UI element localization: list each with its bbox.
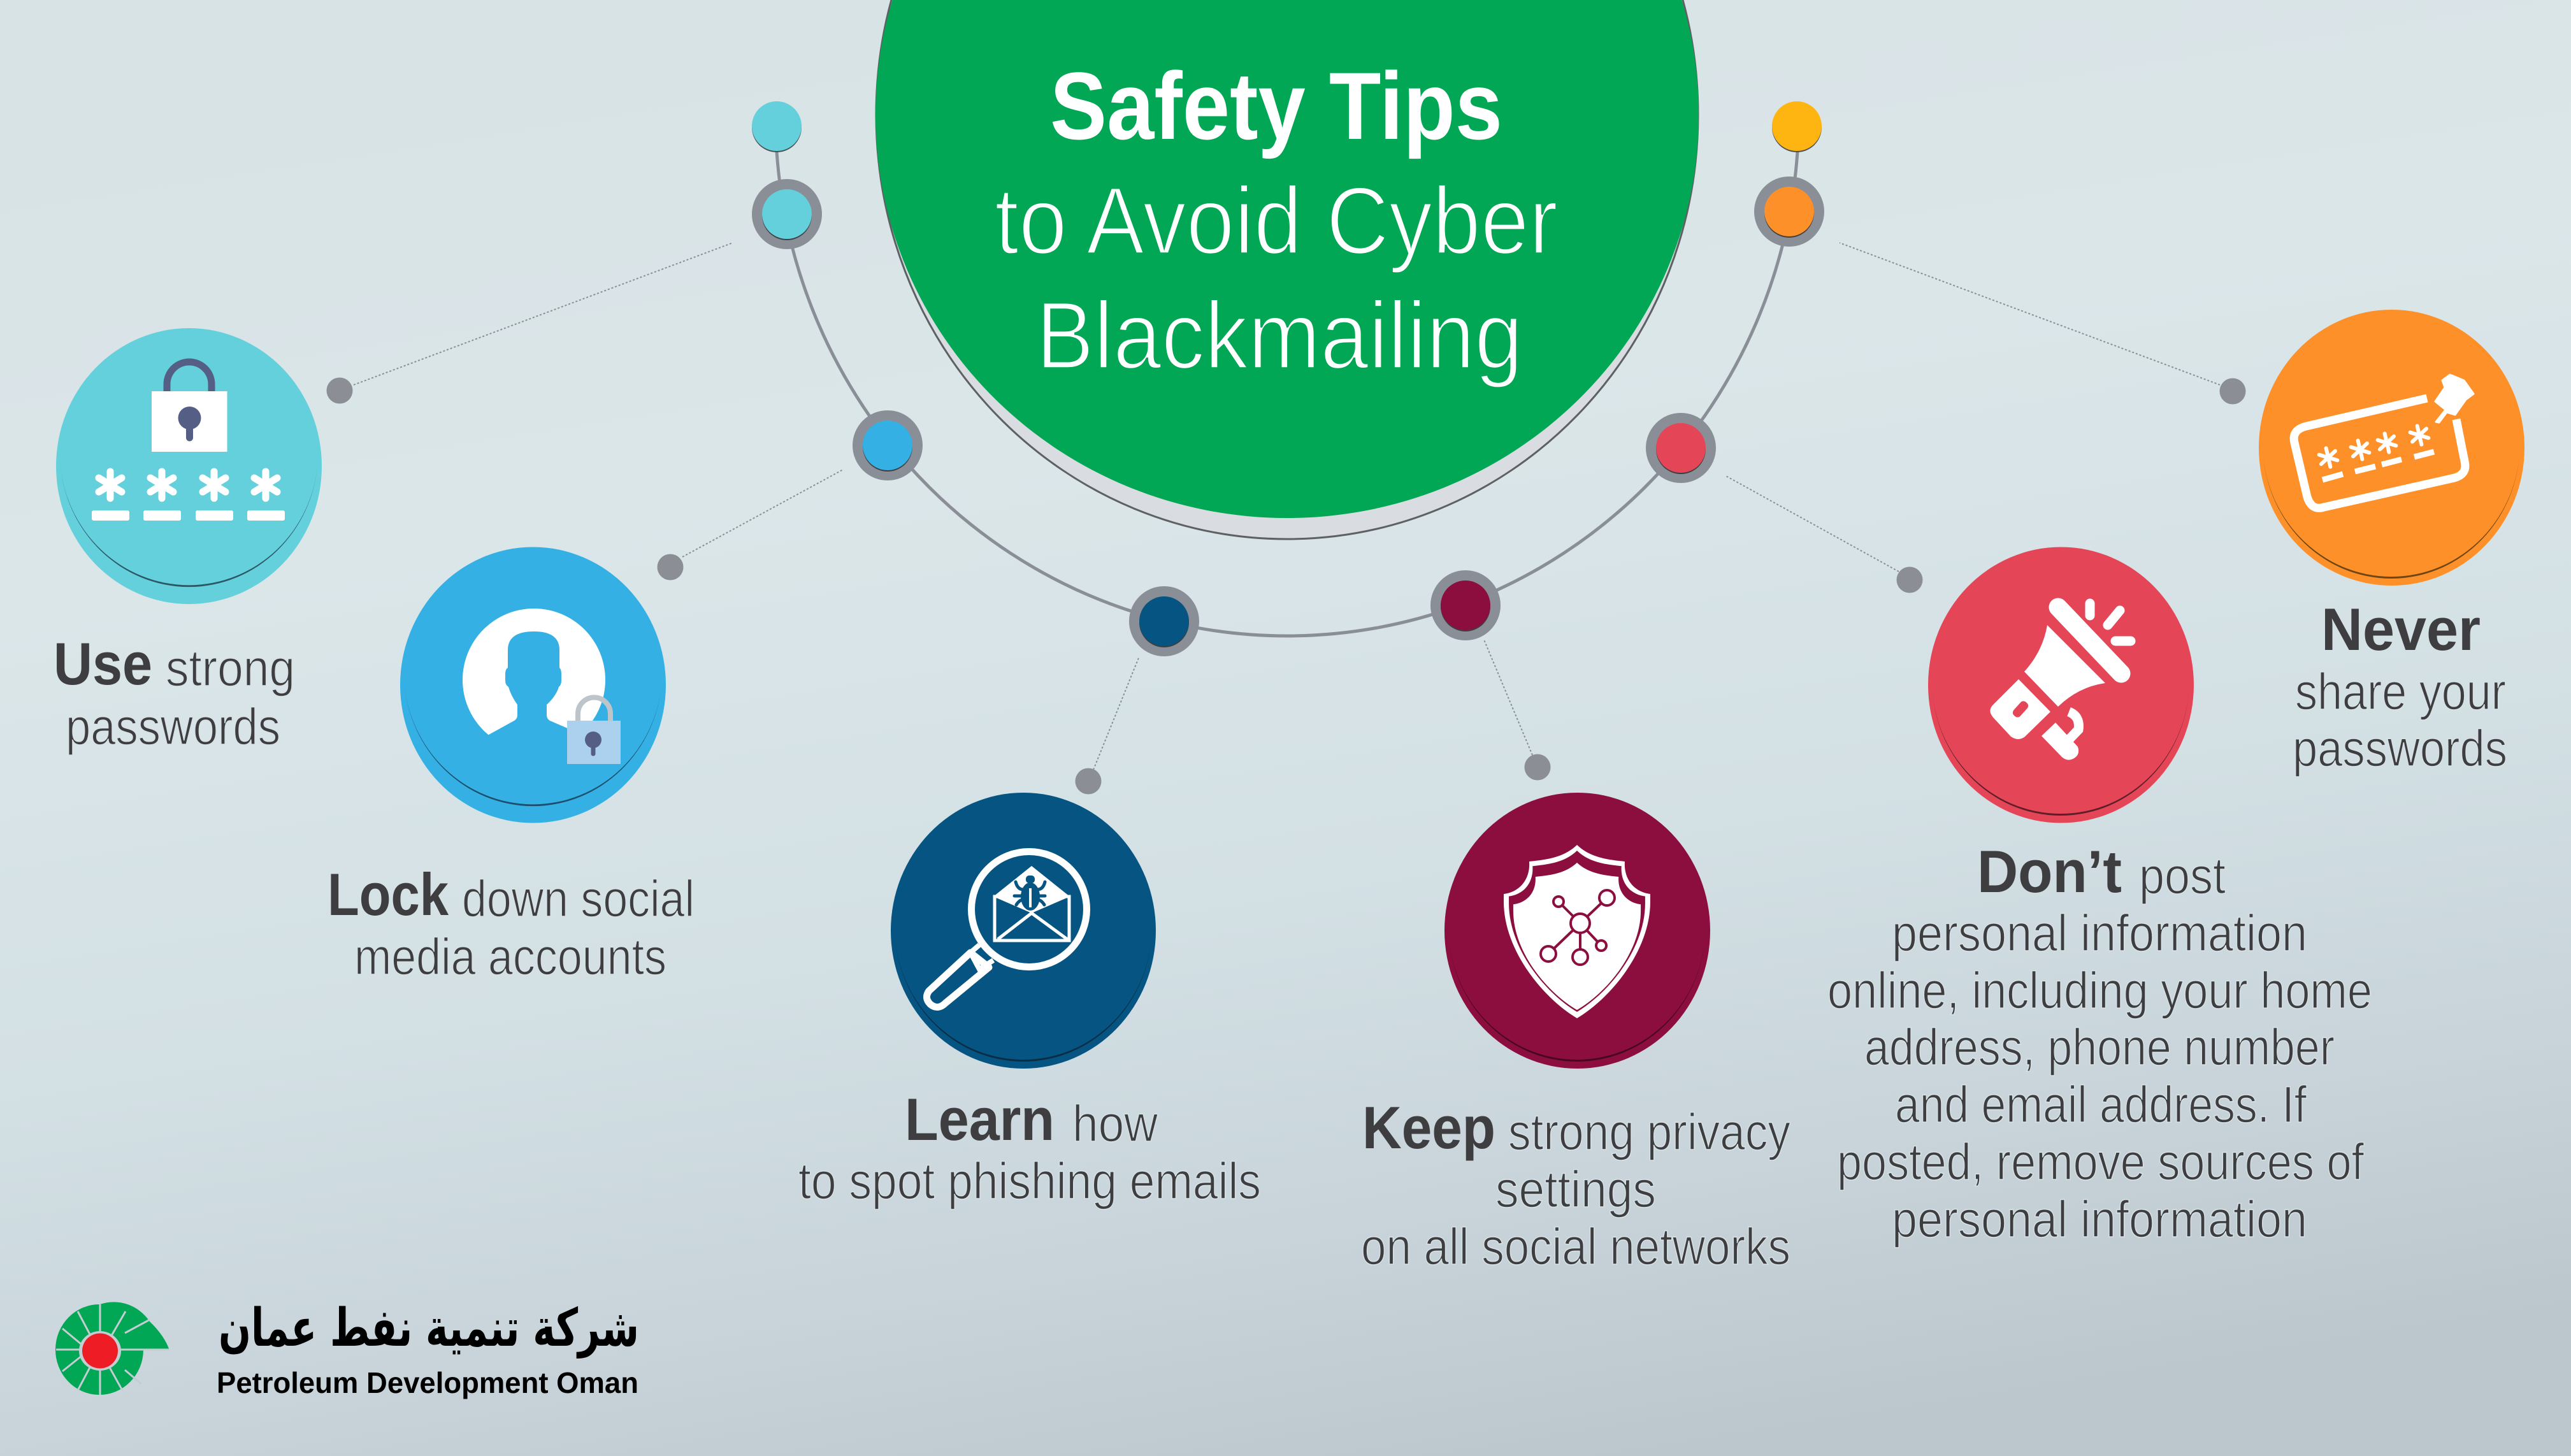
panel: don't post personal information (1827, 547, 2372, 1248)
label: lock down social media accounts: Lock (328, 861, 449, 928)
navy disc (891, 793, 1156, 1069)
label: never share your passwords: passwords (2293, 720, 2507, 777)
English name: Petroleum Development Oman (217, 1366, 638, 1399)
label: use strong passwords (54, 630, 295, 756)
label: never share your passwords (2293, 596, 2507, 777)
connector dots (326, 377, 2245, 794)
label: lock down social media accounts: media accounts (354, 928, 666, 986)
label: keep strong privacy settings on all social networks: strong privacy (1508, 1104, 1790, 1161)
title circle (875, 0, 1699, 539)
red disc (1928, 547, 2194, 823)
icon: megaphone (1990, 603, 2131, 760)
maroon disc (1444, 793, 1710, 1069)
logo mark (55, 1302, 169, 1395)
icon: padlock and asterisks (92, 362, 285, 521)
orange disc (2259, 310, 2524, 586)
label: don't post personal information: posted, remove sources of (1837, 1134, 2364, 1191)
label: keep strong privacy settings on all social networks: on all social networks (1361, 1218, 1790, 1276)
Arabic name: شركة تنمية نفط عمان (219, 1298, 639, 1359)
timeline node: orange (1754, 177, 1824, 247)
label: lock down social media accounts: down social (462, 870, 695, 928)
label: don't post personal information: personal information (1892, 905, 2307, 962)
label: keep strong privacy settings on all social networks (1361, 1094, 1790, 1276)
label: use strong passwords: Use (54, 630, 152, 697)
timeline node: teal (752, 179, 822, 249)
timeline node: navy (1129, 586, 1199, 656)
label: don't post personal information: Don’t (1977, 838, 2122, 905)
title: Blackmailing (1036, 282, 1523, 389)
timeline node: red (1646, 413, 1716, 483)
label: lock down social media accounts (328, 861, 695, 986)
icon: password card with pointer (2294, 375, 2474, 508)
teal disc (56, 328, 322, 604)
label: learn how to spot phishing emails: how (1072, 1095, 1158, 1153)
panel: keep strong privacy settings (1361, 793, 1790, 1276)
panel: lock down social media accounts (328, 547, 695, 986)
label: don't post personal information: and email address. If (1895, 1076, 2307, 1134)
label: learn how to spot phishing emails (798, 1086, 1261, 1210)
panel: never share your passwords (2259, 310, 2524, 777)
title (995, 52, 1558, 389)
logo: Petroleum Development Oman (55, 1298, 639, 1399)
title: Safety Tips (1050, 52, 1502, 159)
panel: use strong passwords (54, 328, 322, 756)
label: learn how to spot phishing emails: to spot phishing emails (798, 1153, 1261, 1210)
label: keep strong privacy settings on all social networks: settings (1495, 1161, 1656, 1218)
blue disc (400, 547, 666, 823)
panel: learn to spot phishing emails (798, 793, 1261, 1210)
title: to Avoid Cyber (995, 167, 1558, 274)
label: keep strong privacy settings on all social networks: Keep (1362, 1094, 1495, 1161)
timeline arc (775, 127, 1799, 636)
label: use strong passwords: passwords (66, 698, 280, 756)
label: learn how to spot phishing emails: Learn (905, 1086, 1055, 1153)
label: don't post personal information: post (2139, 847, 2226, 905)
timeline node: blue (853, 410, 923, 480)
label: don't post personal information: personal information (1892, 1191, 2307, 1248)
dotted connector lines (354, 243, 2220, 770)
timeline node: yellow top (1772, 101, 1822, 152)
label: don't post personal information (1827, 838, 2372, 1248)
icon: magnifier over envelope with bug (926, 851, 1087, 1007)
timeline node: teal top (752, 101, 802, 152)
label: never share your passwords: share your (2295, 663, 2506, 721)
icon: user silhouette with lock (463, 609, 621, 765)
label: don't post personal information: online, including your home (1827, 962, 2372, 1020)
icon: shield with network (1504, 845, 1650, 1018)
label: never share your passwords: Never (2321, 596, 2481, 663)
label: use strong passwords: strong (166, 640, 295, 697)
label: don't post personal information: address, phone number (1864, 1019, 2335, 1076)
timeline node: maroon (1430, 570, 1501, 640)
